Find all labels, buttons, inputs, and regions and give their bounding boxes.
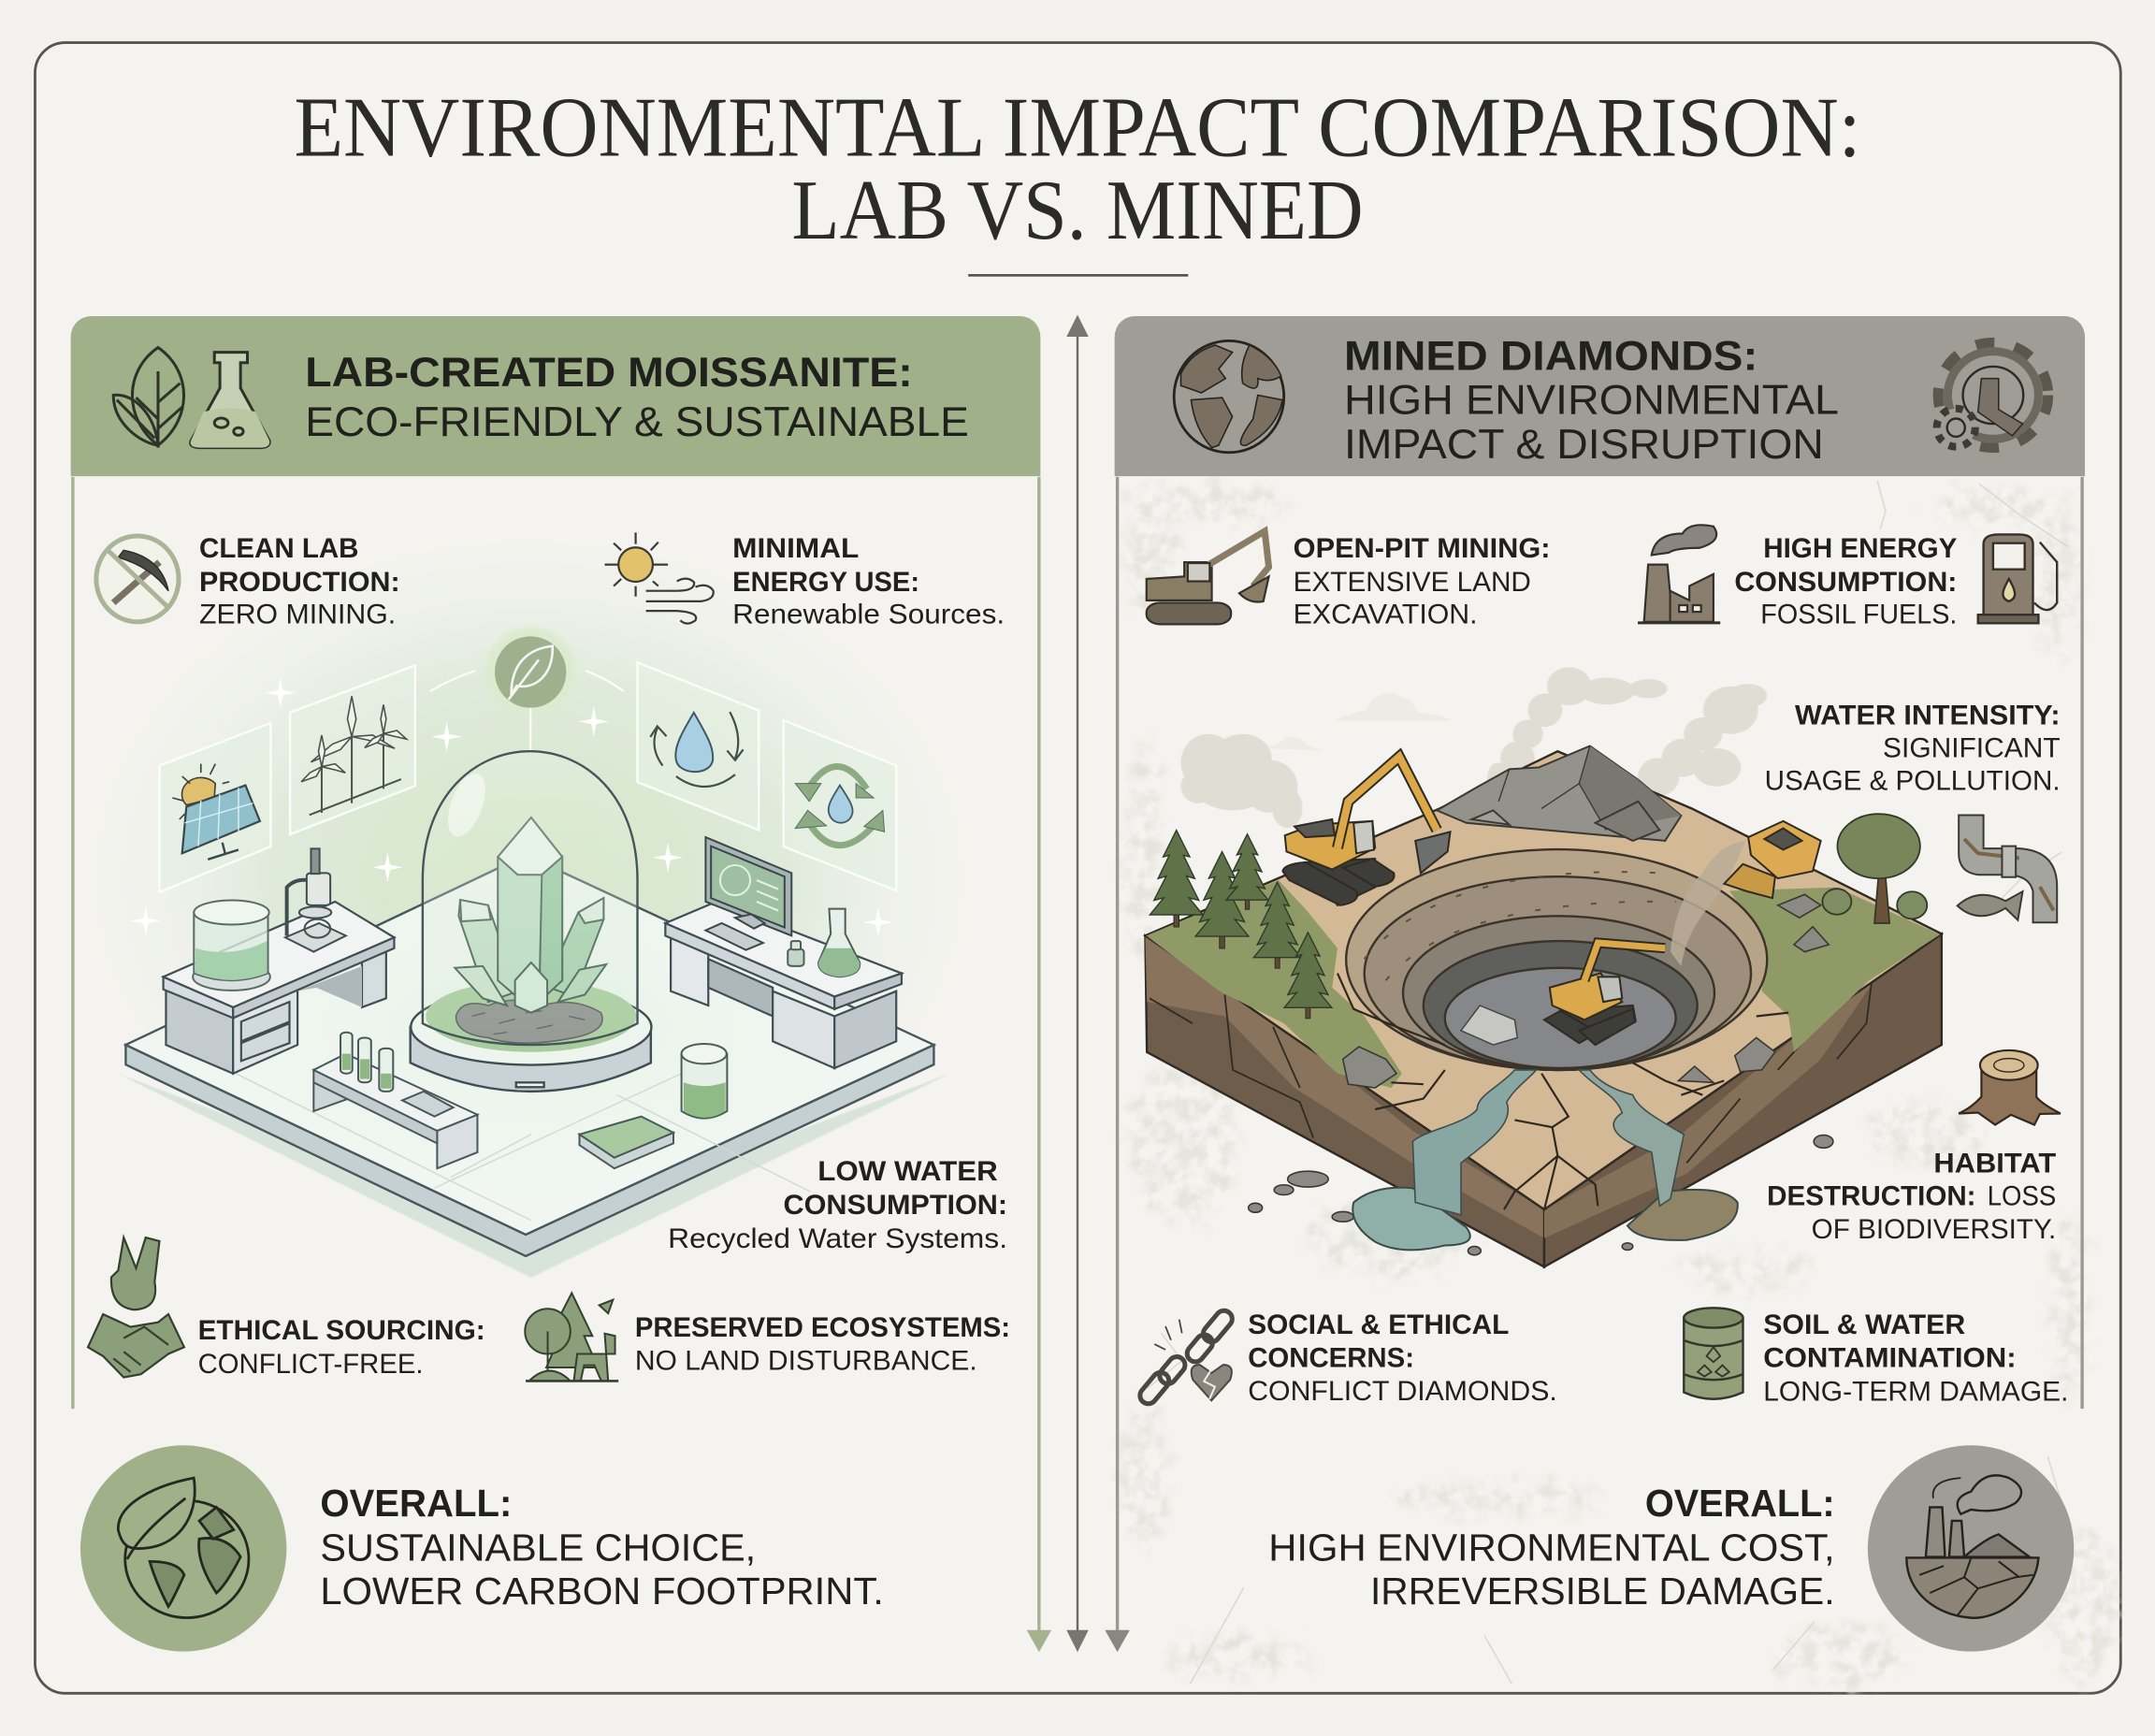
open-pit mining text [1294,533,1550,630]
icon: no mining [96,536,179,622]
icon: contaminated barrel [1684,1308,1743,1399]
mined header text: MINED DIAMONDS: [1344,333,1757,379]
soil and water contamination text: LONG-TERM DAMAGE. [1763,1376,2068,1407]
holographic card: recycling [784,720,896,890]
lab header band [71,316,1040,476]
low water consumption text: Recycled Water Systems. [668,1223,1007,1254]
mined header band [1115,316,2085,476]
holographic card: solar [160,723,270,892]
title underline [968,274,1188,277]
preserved ecosystems text [635,1312,1010,1376]
minimal energy use text: ENERGY USE: [732,567,919,598]
open-pit mining text: EXTENSIVE LAND [1294,567,1531,598]
lab header text: ECO-FRIENDLY & SUSTAINABLE [305,399,969,445]
habitat destruction text: OF BIODIVERSITY. [1812,1214,2056,1245]
monitor and keyboard [705,837,791,950]
mined header text: HIGH ENVIRONMENTAL [1344,377,1839,423]
high energy consumption text: HIGH ENERGY [1763,533,1958,564]
low water consumption text: LOW WATER [817,1156,998,1187]
overall text: mined: HIGH ENVIRONMENTAL COST, [1268,1526,1835,1569]
clean lab production text: CLEAN LAB [199,533,359,564]
overall text: lab [320,1482,884,1613]
leafy tree [1822,814,1927,923]
panel: lab-created moissanite [62,316,1051,1652]
lab header text: LAB-CREATED MOISSANITE: [305,350,913,396]
rock mound [456,1000,602,1043]
open-pit mining text: OPEN-PIT MINING: [1294,533,1550,564]
microscope [285,848,346,952]
panel border lines [73,477,1039,1636]
ground surface [1145,751,1942,1209]
habitat destruction text: LOSS [1988,1181,2056,1212]
water intensity text [1765,700,2061,796]
habitat destruction text [1767,1148,2056,1245]
low water consumption text [668,1156,1007,1254]
smoke plumes [1180,667,1767,828]
open-pit mining text: EXCAVATION. [1294,600,1478,630]
mined header text: IMPACT & DISRUPTION [1344,422,1824,468]
header icon: gears [1937,342,2048,448]
overall text: mined: OVERALL: [1645,1482,1835,1525]
soil and water contamination text [1763,1309,2068,1407]
spoil mountain [1437,745,1681,841]
crystals [455,817,606,1013]
left soil face [1145,751,1942,1266]
water intensity text: USAGE & POLLUTION. [1765,765,2061,796]
minimal energy use text: Renewable Sources. [732,600,1005,630]
clean lab production text: ZERO MINING. [199,600,396,630]
ethical sourcing text [198,1315,485,1380]
right soil face [1544,933,1942,1266]
ethical sourcing text: ETHICAL SOURCING: [198,1315,485,1346]
overall text: lab: LOWER CARBON FOOTPRINT. [320,1570,884,1613]
center divider double arrow [1066,314,1089,1652]
glass beaker with green solution [193,900,270,991]
title: ENVIRONMENTAL IMPACT COMPARISON: [294,80,1861,175]
dump truck [1724,821,1821,898]
holographic card: wind turbines [290,665,415,834]
title: LAB VS. MINED [791,163,1364,257]
bell jar base [411,989,651,1092]
polluted streams [1412,1070,1684,1215]
icon: sun and wind [605,532,714,624]
icon: fuel pump [1978,534,2057,623]
high energy consumption text: FOSSIL FUELS. [1760,600,1957,630]
excavator on rim [1282,757,1451,905]
preserved ecosystems text: NO LAND DISTURBANCE. [635,1345,977,1376]
clean lab production text: PRODUCTION: [199,567,400,598]
platform [118,855,950,1278]
panel background glow [62,515,996,1244]
trees [1150,831,1332,1019]
overall text: mined: IRREVERSIBLE DAMAGE. [1370,1570,1835,1613]
low water consumption text: CONSUMPTION: [784,1190,1007,1221]
social and ethical concerns text [1248,1309,1557,1407]
overall text: lab: OVERALL: [320,1482,512,1525]
marble texture [1119,481,2115,1684]
habitat destruction text: DESTRUCTION: [1767,1181,1976,1212]
lab header text [305,350,969,445]
icon: preserved ecosystem [525,1293,618,1381]
icon: peace hand and handshake [88,1237,184,1378]
title [294,80,1861,257]
panel border lines [1118,477,2082,1636]
overall icon: factory and cracked earth [1868,1445,2074,1652]
overall icon: leaf and earth [80,1445,286,1652]
icon: factory [1638,525,1720,623]
soil and water contamination text: CONTAMINATION: [1763,1342,2017,1373]
arrow down left panel [1027,1630,1051,1652]
flask and bottle on desk [788,909,860,976]
mined header text [1344,333,1839,468]
bell jar and crystals [411,751,651,1092]
left desk [164,902,394,1074]
minimal energy use text [732,533,1005,630]
icon: leaf badge [430,627,624,753]
water intensity text: SIGNIFICANT [1883,733,2061,764]
social and ethical concerns text: SOCIAL & ETHICAL [1248,1309,1509,1340]
icon: excavator [1147,531,1269,624]
header icon: leaf and flask [113,347,269,448]
high energy consumption text: CONSUMPTION: [1734,567,1957,598]
icon: tree stump [1959,1050,2061,1125]
soil and water contamination text: SOIL & WATER [1763,1309,1965,1340]
lab illustration [118,662,950,1278]
tablet [580,1117,673,1168]
vegetation patches [1147,880,1940,1088]
boulders [1249,894,1833,1255]
right desk [665,902,902,1068]
glass dome [423,751,638,1045]
holographic card: water cycle [638,662,759,830]
social and ethical concerns text: CONCERNS: [1248,1342,1414,1373]
excavator in pit [1544,943,1665,1045]
front bench with test tubes [313,1033,477,1168]
icon: broken chain and heart [1136,1308,1236,1407]
high energy consumption text [1734,533,1958,630]
header icon: fractured globe [1174,340,1284,453]
minimal energy use text: MINIMAL [732,533,859,564]
floating sparkles [131,677,893,937]
panel: mined diamonds [1105,316,2115,1684]
habitat destruction text: HABITAT [1933,1148,2056,1179]
dust slide [1670,841,1745,966]
arrow down right panel [1105,1630,1130,1652]
preserved ecosystems text: PRESERVED ECOSYSTEMS: [635,1312,1010,1343]
ethical sourcing text: CONFLICT-FREE. [198,1349,424,1380]
green beaker [682,1044,727,1119]
overall text: lab: SUSTAINABLE CHOICE, [320,1526,756,1569]
ore rocks in pit [1461,1005,1517,1045]
social and ethical concerns text: CONFLICT DIAMONDS. [1248,1376,1557,1407]
icon: polluted pipe and fish [1958,815,2057,922]
cracks in dry ground [1338,974,1788,1209]
green disc [426,980,636,1052]
open pit mine illustration [1145,745,1942,1266]
water intensity text: WATER INTENSITY: [1795,700,2061,731]
polluted pools [1352,1188,1738,1250]
pit terraces [1346,849,1767,1070]
clean lab production text [199,533,400,630]
overall text: mined [1268,1482,1835,1613]
